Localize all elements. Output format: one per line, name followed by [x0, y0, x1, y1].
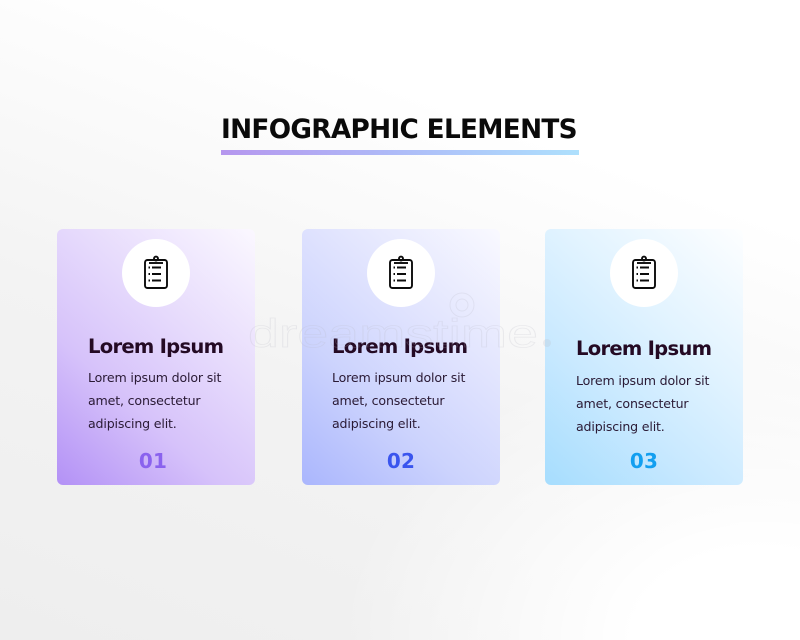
body text: adipiscing elit.: [88, 416, 177, 431]
panel: card 1: [57, 229, 255, 485]
body text: amet, consectetur: [88, 393, 200, 408]
body text: Lorem ipsum dolor sit: [88, 370, 221, 385]
icon: clipboard 3: [610, 239, 678, 307]
panel: card 2: [302, 229, 500, 485]
body text: Lorem ipsum dolor sit: [332, 370, 465, 385]
heading: Lorem Ipsum: [576, 337, 711, 360]
body text: amet, consectetur: [576, 396, 688, 411]
body text: [332, 370, 466, 431]
title underline: [221, 150, 579, 155]
panel: card 3: [545, 229, 743, 485]
body text: amet, consectetur: [332, 393, 444, 408]
heading: Lorem Ipsum: [332, 335, 467, 358]
body text: Lorem ipsum dolor sit: [576, 373, 709, 388]
number 01: 01: [139, 449, 167, 473]
watermark: dreamstime: [248, 312, 538, 355]
watermark: [248, 292, 551, 355]
body text: [576, 373, 710, 434]
icon: clipboard 1: [122, 239, 190, 307]
body text: adipiscing elit.: [332, 416, 421, 431]
heading: Lorem Ipsum: [88, 335, 223, 358]
body text: [88, 370, 222, 431]
body text: adipiscing elit.: [576, 419, 665, 434]
title: INFOGRAPHIC ELEMENTS: [221, 115, 577, 145]
number 03: 03: [630, 449, 658, 473]
number 02: 02: [387, 449, 415, 473]
icon: clipboard 2: [367, 239, 435, 307]
